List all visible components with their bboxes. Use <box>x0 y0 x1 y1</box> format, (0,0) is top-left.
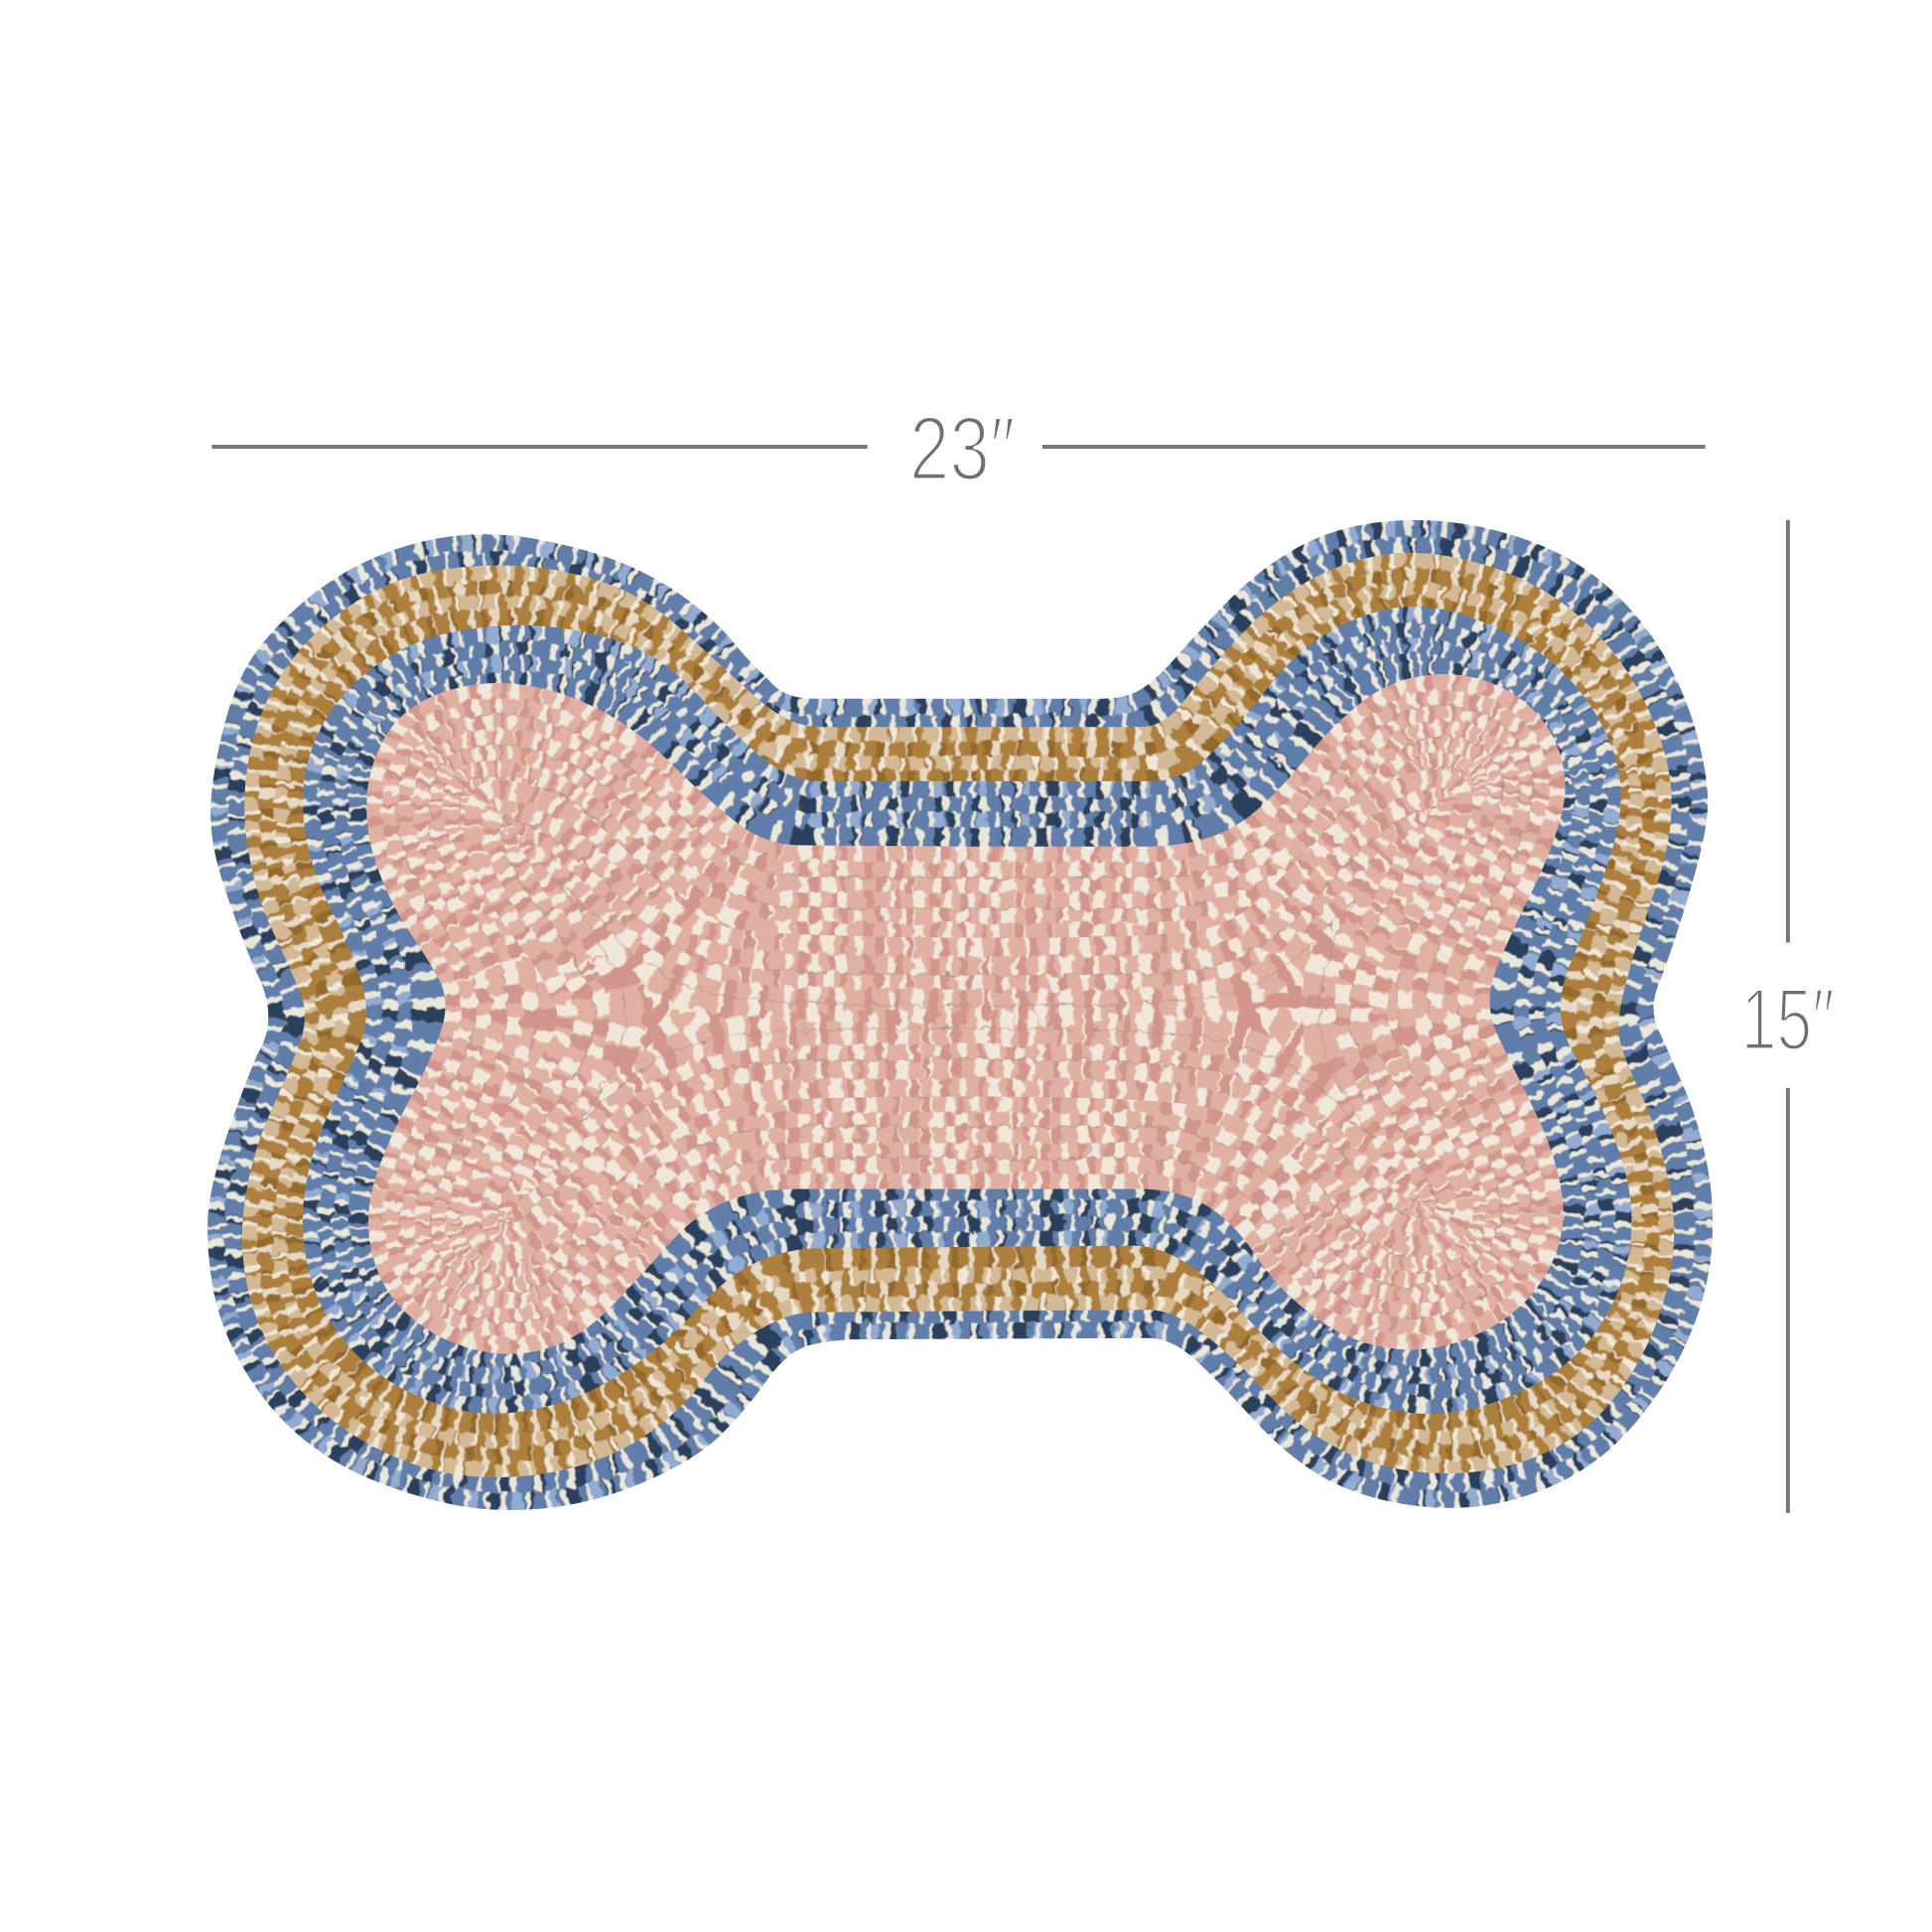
pink centre braid field: inner rows <box>463 768 1474 1263</box>
inner blue braid band <box>302 606 1632 1414</box>
height dimension: 15 inches <box>1741 520 1835 1513</box>
tan braid band <box>242 552 1674 1477</box>
width dimension: 23 inches: 23″ <box>909 399 1016 499</box>
height dimension: 15 inches: 15″ <box>1741 970 1835 1068</box>
outer blue braid band <box>207 520 1713 1510</box>
pink centre braid field: outer rows <box>366 674 1565 1354</box>
braided bone-shaped rug <box>207 520 1713 1510</box>
infographic canvas <box>207 418 1833 1513</box>
width dimension: 23 inches <box>211 399 1706 499</box>
